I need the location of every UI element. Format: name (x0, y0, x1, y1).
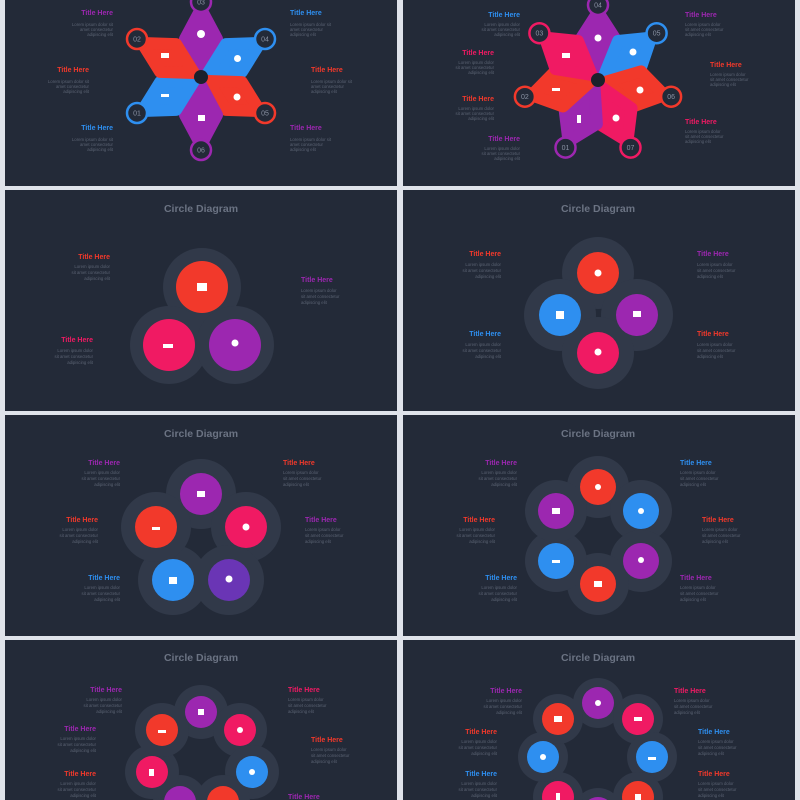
text: slide 2 labels: Lorem ipsum dolor (458, 60, 495, 65)
text: slide 8 labels: adipiscing elit (496, 710, 523, 715)
text: slide 6 labels: adipiscing elit (702, 539, 729, 544)
text: slide 1 labels: adipiscing elit (290, 32, 317, 37)
panel: slide 5 five circles (5, 415, 397, 636)
panel: slide 3 three circles (5, 190, 397, 411)
text: slide 2 labels: Title Here (488, 12, 520, 19)
text: slide 5 labels: sit amet consectetur (283, 476, 322, 481)
text: slide 7 labels: adipiscing elit (288, 709, 315, 714)
text: slide 1 labels: Lorem ipsum dolor sit (290, 22, 332, 27)
text: slide 3 labels: Lorem ipsum dolor (74, 264, 111, 269)
text: slide 1 labels (48, 10, 353, 152)
petal diagram 7 (515, 0, 681, 158)
text: slide 6 labels: Lorem ipsum dolor (702, 527, 738, 532)
text: slide 8 labels: adipiscing elit (471, 751, 498, 756)
text: slide 2 labels: adipiscing elit (494, 156, 521, 161)
text: slide 1 labels: Lorem ipsum dolor sit (72, 137, 114, 142)
heading: Circle Diagram (561, 203, 635, 215)
text: slide 2 labels: Title Here (488, 136, 520, 143)
text: slide 6 labels: Title Here (680, 460, 712, 467)
text: slide 4 labels: adipiscing elit (697, 354, 724, 359)
text: slide 3 labels (55, 254, 340, 365)
text: slide 6 labels: Lorem ipsum dolor (481, 585, 518, 590)
text: slide 8 labels: Title Here (465, 729, 497, 736)
text: slide 1 labels: amet consectetur (311, 84, 345, 89)
text: slide 6 labels: Title Here (485, 575, 517, 582)
text: slide 5 labels: adipiscing elit (72, 539, 99, 544)
text: slide 2 labels: sit amet consectetur (456, 65, 495, 70)
text: slide 6 labels: Lorem ipsum dolor (680, 470, 716, 475)
text: slide 6 labels: sit amet consectetur (479, 591, 518, 596)
text: slide 7 labels: adipiscing elit (70, 793, 97, 798)
text: slide 2 labels: Lorem ipsum dolor (484, 146, 521, 151)
text: slide 6 labels: Title Here (680, 575, 712, 582)
text: slide 2 labels: sit amet consectetur (482, 151, 521, 156)
text: slide 2 labels: sit amet consectetur (685, 134, 724, 139)
text: slide 7 labels: Lorem ipsum dolor (86, 697, 123, 702)
text: slide 7 labels: Title Here (64, 726, 96, 733)
text: slide 8 labels: Title Here (674, 688, 706, 695)
text: slide 8 labels: Lorem ipsum dolor (698, 739, 734, 744)
text: slide 8 labels: Lorem ipsum dolor (698, 781, 734, 786)
text: slide 2 labels: Lorem ipsum dolor (685, 22, 721, 27)
text: slide 8 labels: sit amet consectetur (459, 787, 498, 792)
heading: Circle Diagram (561, 428, 635, 440)
text: slide 1 labels: adipiscing elit (311, 89, 338, 94)
text: slide 5 labels: Lorem ipsum dolor (62, 527, 99, 532)
text: slide 2 labels: Lorem ipsum dolor (484, 22, 521, 27)
text: slide 8 labels (459, 688, 737, 798)
text: slide 7 labels: sit amet consectetur (311, 753, 350, 758)
text: slide 8 labels: Lorem ipsum dolor (461, 781, 498, 786)
text: slide 4 labels: sit amet consectetur (697, 268, 736, 273)
text: slide 5 labels: Title Here (283, 460, 315, 467)
circle cluster (125, 685, 279, 800)
text: slide 2 labels: adipiscing elit (685, 32, 712, 37)
text: slide 6 labels: sit amet consectetur (457, 533, 496, 538)
text: slide 2 labels: Title Here (462, 96, 494, 103)
text: slide 1 labels: Lorem ipsum dolor sit (72, 22, 114, 27)
text: slide 7 labels: sit amet consectetur (84, 703, 123, 708)
petal diagram: 02 (133, 36, 141, 44)
petal diagram 7: 05 (653, 31, 661, 38)
text: slide 7 labels: Lorem ipsum dolor (288, 697, 324, 702)
petal diagram: 04 (261, 36, 269, 44)
text: slide 4 labels: Lorem ipsum dolor (465, 342, 502, 347)
text: slide 5 labels: adipiscing elit (94, 482, 121, 487)
text: slide 5 labels: Title Here (305, 517, 337, 524)
text: slide 6 labels: sit amet consectetur (702, 533, 741, 538)
petal diagram: 01 (133, 110, 141, 118)
text: slide 4 labels: Title Here (469, 251, 501, 258)
circle cluster (525, 456, 672, 615)
petal diagram 7: 02 (521, 94, 529, 101)
text: slide 7 labels (58, 687, 350, 800)
text: slide 2 labels: sit amet consectetur (482, 27, 521, 32)
text: slide 2 labels: adipiscing elit (468, 70, 495, 75)
heading: Circle Diagram (164, 203, 238, 215)
text: slide 5 labels: adipiscing elit (283, 482, 310, 487)
text: slide 2 labels: Title Here (710, 62, 742, 69)
text: slide 5 labels: Title Here (88, 575, 120, 582)
petal diagram: 05 (261, 110, 269, 118)
circle cluster (524, 237, 673, 389)
text: slide 8 labels: sit amet consectetur (484, 704, 523, 709)
circle cluster (130, 248, 274, 384)
text: slide 8 labels: adipiscing elit (698, 793, 725, 798)
petal diagram 7: 04 (594, 2, 602, 10)
text: slide 3 labels: sit amet consectetur (301, 294, 340, 299)
text: slide 5 labels: Lorem ipsum dolor (84, 470, 121, 475)
petal diagram (127, 0, 275, 160)
text: slide 1 labels: amet consectetur (290, 142, 324, 147)
petal diagram 7: 06 (667, 94, 675, 101)
text: slide 3 labels: Title Here (301, 277, 333, 284)
text: slide 1 labels: amet consectetur (80, 142, 114, 147)
text: slide 7 labels: Lorem ipsum dolor (60, 781, 97, 786)
text: slide 7 labels: Lorem ipsum dolor (311, 747, 347, 752)
text: slide 4 labels: sit amet consectetur (463, 348, 502, 353)
text: slide 1 labels: adipiscing elit (63, 89, 90, 94)
panel: slide 4 four circles (403, 190, 795, 411)
text: slide 8 labels: Title Here (465, 771, 497, 778)
text: slide 1 labels: Title Here (290, 10, 322, 17)
heading: Circle Diagram (561, 652, 635, 664)
text: slide 2 labels: Title Here (685, 12, 717, 19)
petal diagram 7: 01 (562, 145, 569, 152)
text: slide 7 labels: adipiscing elit (311, 759, 338, 764)
circle cluster (121, 459, 281, 615)
text: slide 5 labels: adipiscing elit (305, 539, 332, 544)
text: slide 5 labels: Lorem ipsum dolor (84, 585, 121, 590)
text: slide 5 labels (60, 460, 344, 602)
text: slide 5 labels: Lorem ipsum dolor (283, 470, 319, 475)
text: slide 6 labels: adipiscing elit (680, 482, 707, 487)
text: slide 1 labels: Lorem ipsum dolor sit (311, 79, 353, 84)
panel: slide 2 seven petal diagram (403, 0, 795, 186)
text: slide 7 labels: sit amet consectetur (288, 703, 327, 708)
text: slide 7 labels: Title Here (311, 737, 343, 744)
text: slide 6 labels: Lorem ipsum dolor (680, 585, 716, 590)
text: slide 3 labels: adipiscing elit (301, 300, 328, 305)
text: slide 5 labels: Title Here (88, 460, 120, 467)
text: slide 2 labels: Title Here (462, 50, 494, 57)
text: slide 7 labels: Title Here (64, 771, 96, 778)
text: slide 4 labels: Lorem ipsum dolor (697, 262, 733, 267)
text: slide 5 labels: sit amet consectetur (305, 533, 344, 538)
text: slide 1 labels: adipiscing elit (87, 147, 114, 152)
text: slide 1 labels: Title Here (81, 125, 113, 132)
text: slide 5 labels: sit amet consectetur (60, 533, 99, 538)
text: slide 4 labels: adipiscing elit (475, 274, 502, 279)
text: slide 6 labels: Title Here (463, 517, 495, 524)
text: slide 2 labels: Lorem ipsum dolor (710, 72, 746, 77)
text: slide 4 labels: adipiscing elit (475, 354, 502, 359)
panel: slide 7 seven circles (5, 640, 397, 800)
text: slide 3 labels: Lorem ipsum dolor (57, 348, 94, 353)
text: slide 1 labels: Title Here (311, 67, 343, 74)
text: slide 2 labels: adipiscing elit (685, 139, 712, 144)
text: slide 6 labels: Title Here (702, 517, 734, 524)
panel: slide 1 six petal diagram (5, 0, 397, 186)
text: slide 4 labels: adipiscing elit (697, 274, 724, 279)
text: slide 7 labels: adipiscing elit (96, 709, 123, 714)
petal diagram: 06 (197, 148, 205, 154)
text: slide 8 labels: Title Here (698, 729, 730, 736)
text: slide 4 labels: Lorem ipsum dolor (697, 342, 733, 347)
text: slide 6 labels (457, 460, 741, 602)
text: slide 2 labels: sit amet consectetur (456, 111, 495, 116)
text: slide 6 labels: adipiscing elit (491, 482, 518, 487)
text: slide 4 labels: Title Here (697, 331, 729, 338)
text: slide 8 labels: Title Here (698, 771, 730, 778)
text: slide 8 labels: sit amet consectetur (698, 745, 737, 750)
text: slide 6 labels: sit amet consectetur (680, 476, 719, 481)
petal diagram 7: 03 (536, 31, 543, 38)
text: slide 5 labels: Lorem ipsum dolor (305, 527, 341, 532)
text: slide 2 labels: Title Here (685, 119, 717, 126)
text: slide 6 labels: sit amet consectetur (680, 591, 719, 596)
text: slide 6 labels: Title Here (485, 460, 517, 467)
text: slide 4 labels: Title Here (469, 331, 501, 338)
text: slide 3 labels: sit amet consectetur (72, 270, 111, 275)
text: slide 1 labels: amet consectetur (290, 27, 324, 32)
text: slide 3 labels: sit amet consectetur (55, 354, 94, 359)
text: slide 3 labels: adipiscing elit (67, 360, 94, 365)
text: slide 7 labels: adipiscing elit (70, 748, 97, 753)
text: slide 1 labels: amet consectetur (80, 27, 114, 32)
text: slide 7 labels: Lorem ipsum dolor (60, 736, 97, 741)
text: slide 8 labels: Lorem ipsum dolor (486, 698, 523, 703)
text: slide 3 labels: Lorem ipsum dolor (301, 288, 337, 293)
text: slide 5 labels: sit amet consectetur (82, 476, 121, 481)
text: slide 8 labels: sit amet consectetur (674, 704, 713, 709)
text: slide 6 labels: adipiscing elit (680, 597, 707, 602)
text: slide 3 labels: Title Here (78, 254, 110, 261)
text: slide 7 labels: sit amet consectetur (58, 742, 97, 747)
panel: slide 8 eight circles (403, 640, 795, 800)
text: slide 1 labels: amet consectetur (56, 84, 90, 89)
text: slide 1 labels: Title Here (57, 67, 89, 74)
text: slide 4 labels (463, 251, 736, 359)
text: slide 2 labels: sit amet consectetur (685, 27, 724, 32)
text: slide 1 labels: Title Here (81, 10, 113, 17)
text: slide 4 labels: sit amet consectetur (697, 348, 736, 353)
panel: slide 6 six circles (403, 415, 795, 636)
text: slide 8 labels: Title Here (490, 688, 522, 695)
text: slide 1 labels: adipiscing elit (290, 147, 317, 152)
text: slide 6 labels: adipiscing elit (469, 539, 496, 544)
text: slide 5 labels: sit amet consectetur (82, 591, 121, 596)
text: slide 1 labels: Title Here (290, 125, 322, 132)
text: slide 2 labels (456, 12, 749, 161)
text: slide 3 labels: Title Here (61, 337, 93, 344)
text: slide 8 labels: Lorem ipsum dolor (674, 698, 710, 703)
circle cluster (518, 678, 677, 800)
text: slide 5 labels: adipiscing elit (94, 597, 121, 602)
text: slide 8 labels: Lorem ipsum dolor (461, 739, 498, 744)
text: slide 2 labels: Lorem ipsum dolor (685, 129, 721, 134)
text: slide 1 labels: adipiscing elit (87, 32, 114, 37)
text: slide 2 labels: adipiscing elit (710, 82, 737, 87)
text: slide 6 labels: Lorem ipsum dolor (481, 470, 518, 475)
text: slide 2 labels: adipiscing elit (494, 32, 521, 37)
text: slide 8 labels: adipiscing elit (698, 751, 725, 756)
text: slide 4 labels: Title Here (697, 251, 729, 258)
text: slide 7 labels: Title Here (90, 687, 122, 694)
text: slide 2 labels: sit amet consectetur (710, 77, 749, 82)
text: slide 2 labels: adipiscing elit (468, 116, 495, 121)
heading: Circle Diagram (164, 652, 238, 664)
petal diagram 7: 07 (627, 145, 634, 152)
text: slide 1 labels: Lorem ipsum dolor sit (48, 79, 90, 84)
text: slide 4 labels: sit amet consectetur (463, 268, 502, 273)
text: slide 4 labels: Lorem ipsum dolor (465, 262, 502, 267)
text: slide 8 labels: adipiscing elit (471, 793, 498, 798)
text: slide 3 labels: adipiscing elit (84, 276, 111, 281)
text: slide 2 labels: Lorem ipsum dolor (458, 106, 495, 111)
text: slide 5 labels: Title Here (66, 517, 98, 524)
text: slide 8 labels: adipiscing elit (674, 710, 701, 715)
text: slide 8 labels: sit amet consectetur (459, 745, 498, 750)
text: slide 8 labels: sit amet consectetur (698, 787, 737, 792)
text: slide 7 labels: Title Here (288, 687, 320, 694)
text: slide 6 labels: Lorem ipsum dolor (459, 527, 496, 532)
text: slide 7 labels: sit amet consectetur (58, 787, 97, 792)
text: slide 6 labels: adipiscing elit (491, 597, 518, 602)
text: slide 6 labels: sit amet consectetur (479, 476, 518, 481)
heading: Circle Diagram (164, 428, 238, 440)
text: slide 1 labels: Lorem ipsum dolor sit (290, 137, 332, 142)
